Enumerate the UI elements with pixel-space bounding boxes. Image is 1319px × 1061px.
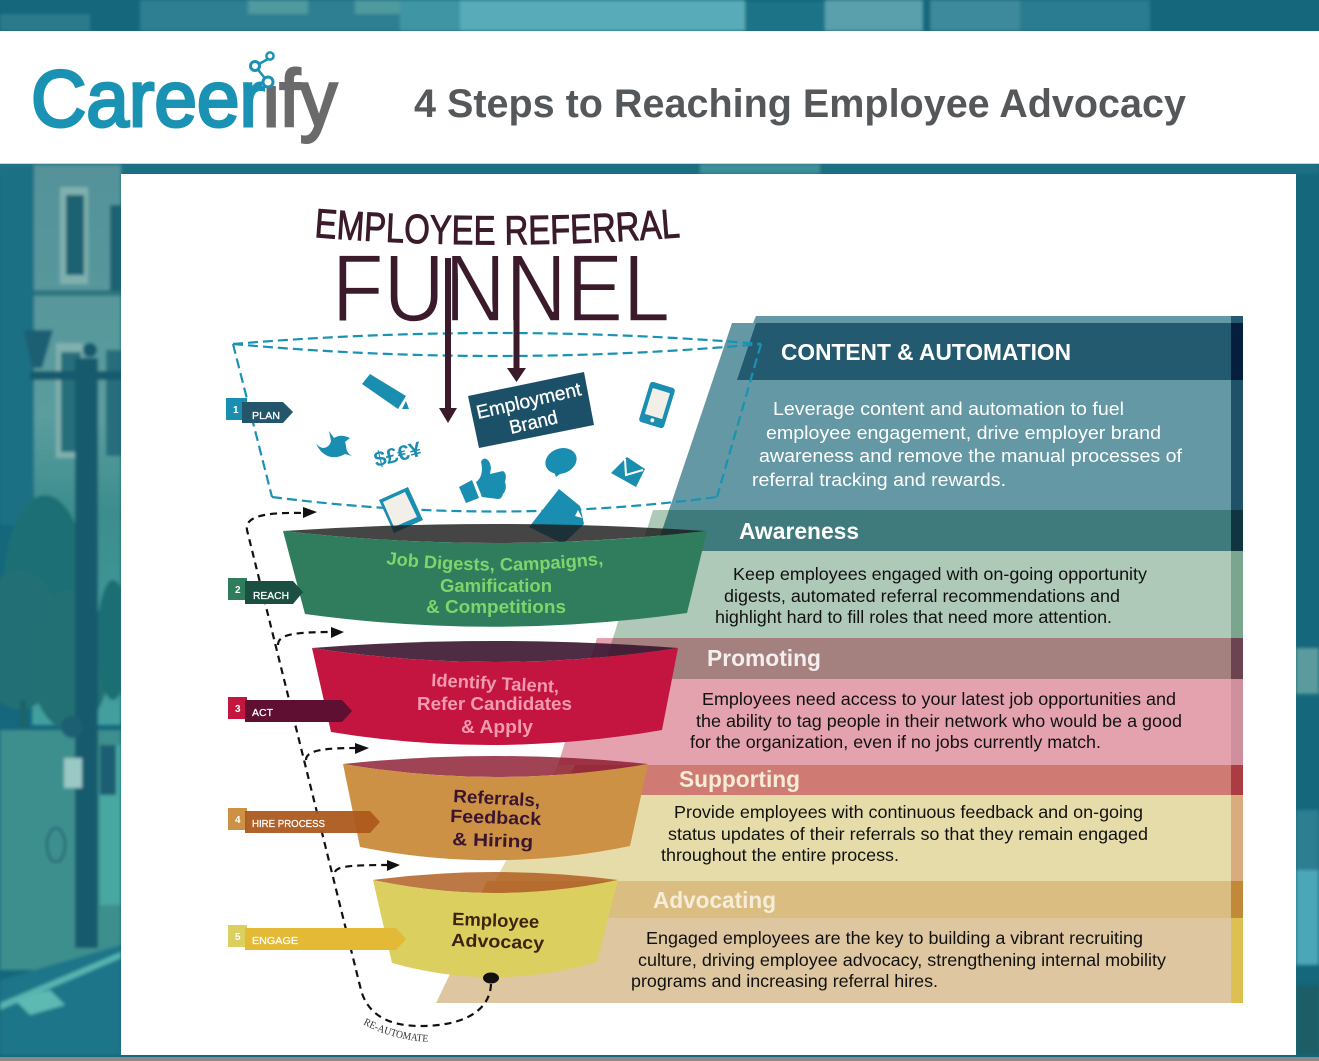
step tag 5: engage: 5 [235,932,241,943]
icon: document [529,489,584,544]
funnel stage: engage: Advocacy [451,930,545,953]
funnel stage: reach [283,524,707,627]
panel text: digests, automated referral recommendations and [724,586,1120,606]
arrow: into funnel right [507,258,526,382]
title: funnel: FUNNEL [332,235,670,342]
logo: Careerify: Career [31,54,265,143]
panel heading: CONTENT & AUTOMATION [781,339,1071,365]
step tag 3: act: ACT [252,707,274,719]
panel text: the ability to tag people in their network who would be a good [696,711,1182,731]
panel text: employee engagement, drive employer brand [766,422,1161,443]
panel: content and automation [669,316,1243,510]
step tag 5: engage [228,925,406,950]
funnel stage: hire process: Referrals, [453,786,541,811]
funnel stage: act: Refer Candidates [417,694,572,714]
header band [0,31,1319,164]
title: employee referral: EMPLOYEE REFERRAL [316,208,680,245]
panel text [752,398,1183,490]
step tag 3: act: 3 [235,704,241,715]
label: re-automate: RE-AUTOMATE [363,1018,428,1042]
step tag 4: hire process: HIRE PROCESS [252,818,325,830]
funnel stage: reach: Job Digests, Campaigns, [386,552,602,574]
panel text [690,689,1182,752]
funnel stage: hire process: & Hiring [452,829,534,852]
panel: advocating [436,881,1243,1003]
panel text: Keep employees engaged with on-going opportunity [733,564,1147,584]
step tag 2: reach: REACH [253,590,289,602]
panel text [715,564,1147,627]
panel text: Employees need access to your latest job opportunities and [702,689,1176,709]
funnel stage: act [312,641,678,745]
arrow: into funnel left [439,258,457,423]
panel text [631,928,1166,991]
step tag 4: hire process [228,808,380,833]
icon: envelope [611,457,645,487]
dashed top funnel outline [233,333,761,512]
panel text: awareness and remove the manual processes of [759,445,1183,466]
funnel stage: act: & Apply [461,717,533,737]
panel text: Provide employees with continuous feedback and on-going [674,802,1143,822]
panel: awareness [613,510,1243,638]
left strip scene [0,165,129,1055]
icon: tablet [638,381,676,429]
step tag 2: reach: 2 [235,585,241,596]
bottom bar [0,1057,1319,1061]
step tag 1: plan [226,398,293,423]
funnel stage: hire process: Feedback [450,806,543,829]
panel: promoting [558,638,1243,765]
panel text: for the organization, even if no jobs currently match. [690,732,1101,752]
white infographic card [121,174,1296,1055]
step tag 2: reach [228,578,303,604]
right strip scene [1296,648,1319,1055]
icon: employment brand tag [468,372,594,448]
icon: thumbs up [459,459,506,503]
panel text: Engaged employees are the key to building a vibrant recruiting [646,928,1143,948]
funnel stage: engage [373,872,618,977]
icon: currency symbols: $£€¥ [372,438,424,472]
icon: employment brand tag: Employment [474,379,584,424]
funnel stage: reach: Gamification [440,576,552,596]
panel text: throughout the entire process. [661,845,899,865]
funnel stage: act: Identify Talent, [431,670,560,697]
panel text [661,802,1148,865]
panel heading: Awareness [739,518,859,544]
dashed loop: re-automate [247,513,491,1026]
icon: twitter bird [316,431,352,457]
step tag 4: hire process: 4 [235,815,241,826]
panel text: highlight hard to fill roles that need more attention. [715,607,1112,627]
panel text: Leverage content and automation to fuel [773,398,1124,419]
panel text: culture, driving employee advocacy, strengthening internal mobility [638,950,1166,970]
panel heading: Advocating [653,887,776,913]
funnel stage: engage: Employee [452,909,540,932]
step tag 1: plan: PLAN [252,410,280,422]
heading: 4 Steps to Reaching Employee Advocacy [414,82,1187,126]
funnel stage: hire process [343,756,648,860]
icon: photo frame [379,487,423,533]
funnel stage: reach: & Competitions [426,597,566,617]
logo: Careerify: ify [263,54,337,143]
step tag 5: engage: ENGAGE [252,935,298,947]
step tag 1: plan: 1 [233,405,239,416]
lamp post [75,358,98,948]
arrowheads [303,507,499,984]
icon: employment brand tag: Brand [507,407,560,439]
panel heading: Supporting [679,766,800,792]
panel text: referral tracking and rewards. [752,469,1006,490]
icon: pencil [362,374,409,409]
icon: speech bubble [542,444,580,478]
panel: supporting [495,765,1243,881]
panel text: programs and increasing referral hires. [631,971,938,991]
panel heading: Promoting [707,645,821,671]
panel text: status updates of their referrals so that they remain engaged [668,824,1148,844]
step tag 3: act [228,697,352,722]
